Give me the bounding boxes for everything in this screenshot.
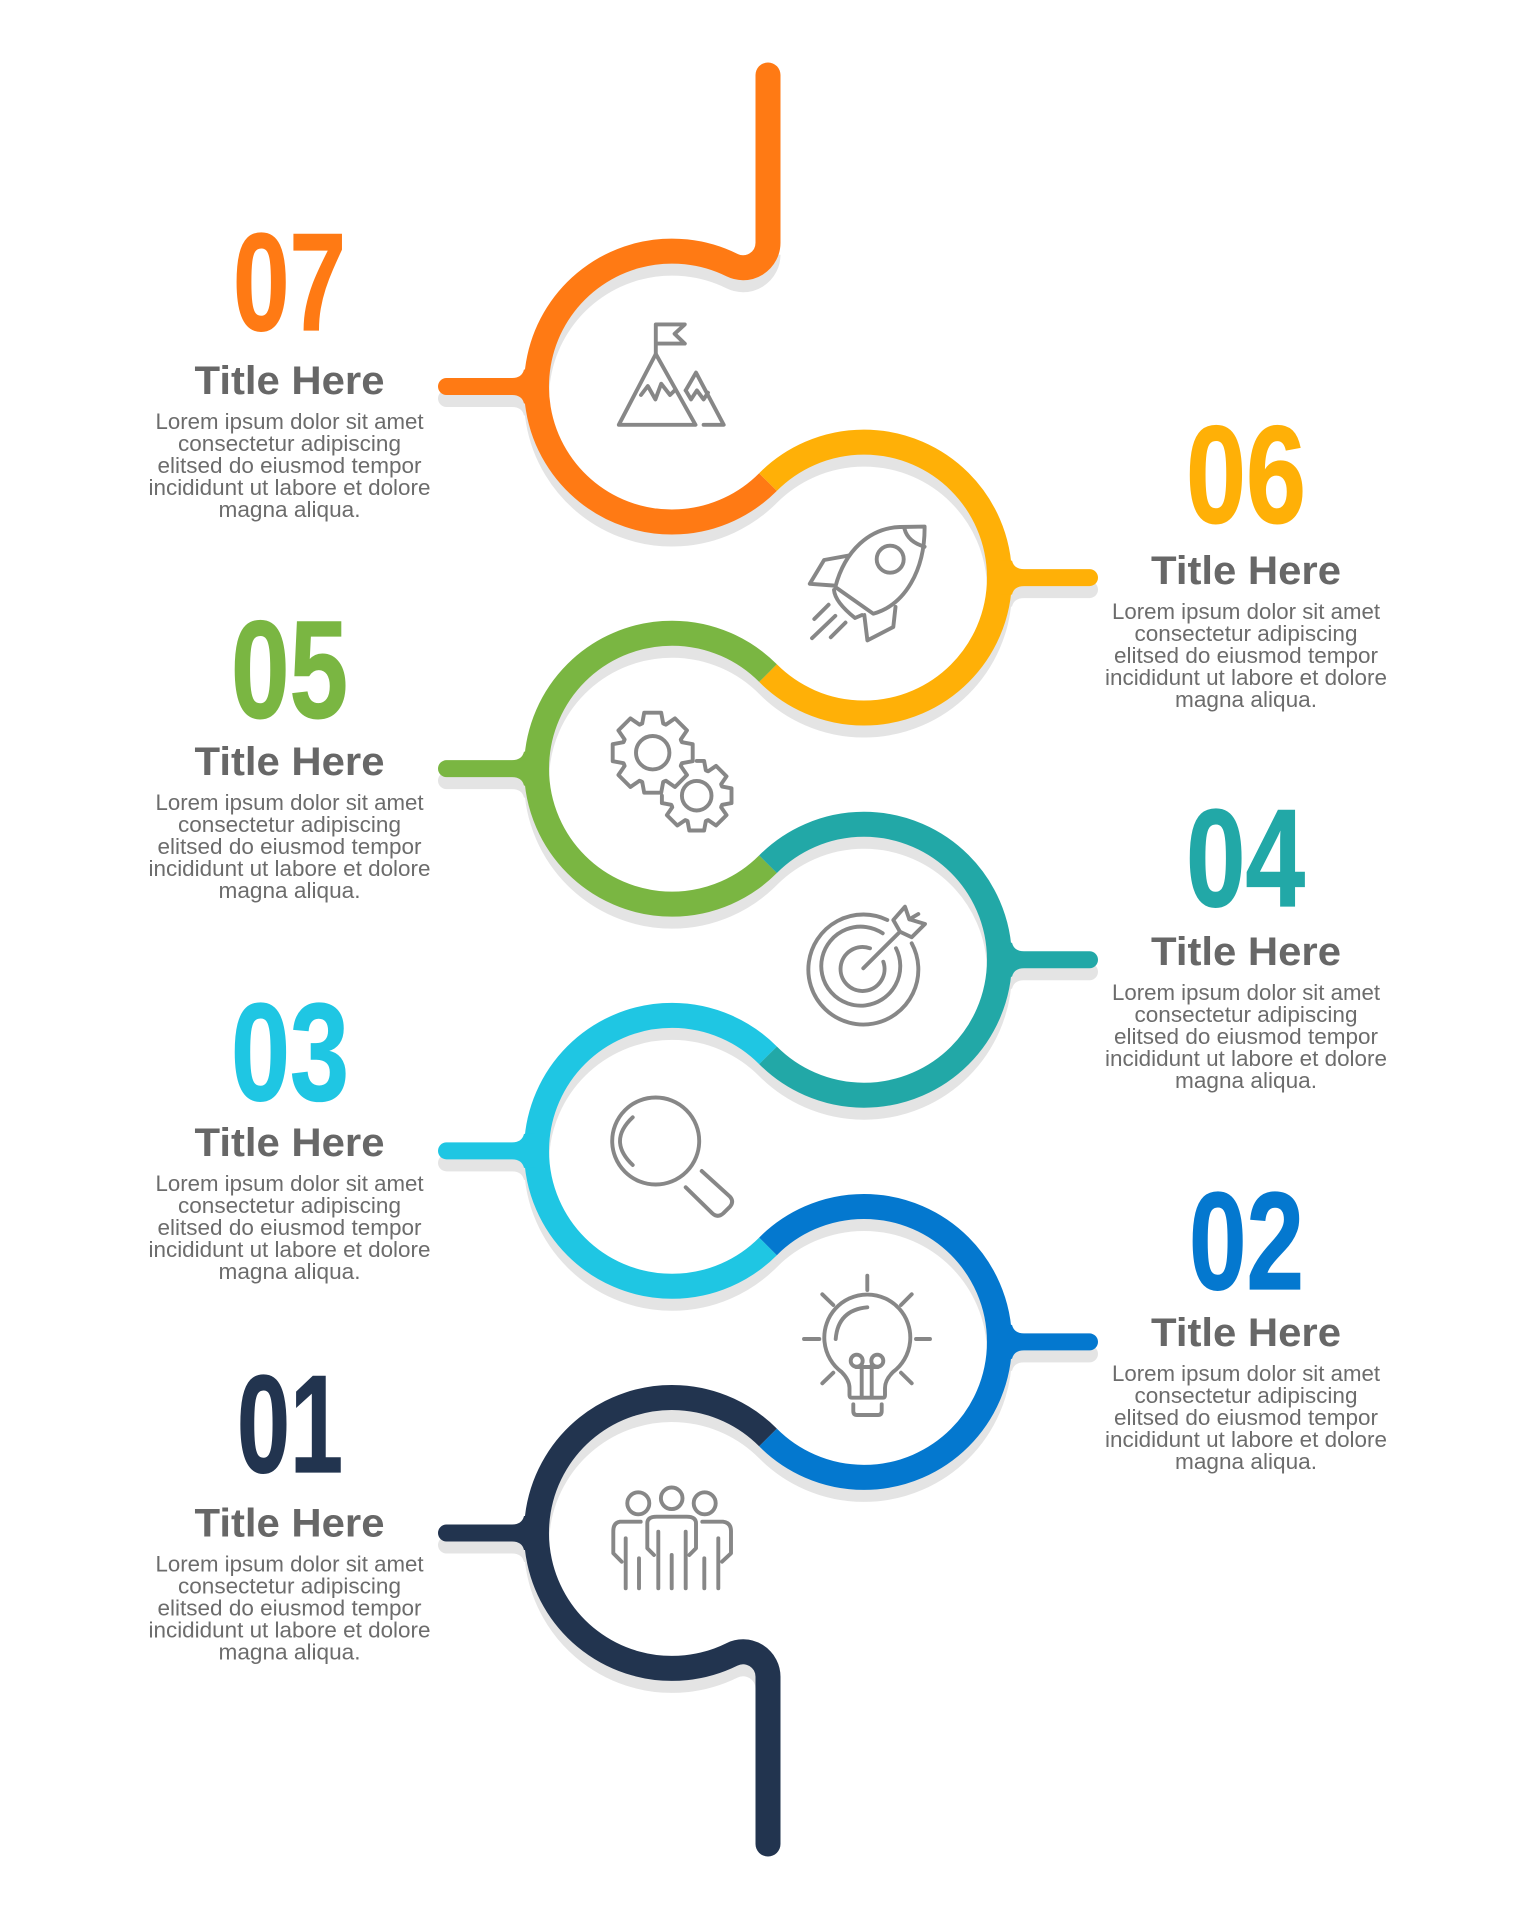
body 06: Lorem ipsum dolor sit amet xyxy=(1112,599,1380,624)
body 01 xyxy=(148,1552,430,1664)
body 05: magna aliqua. xyxy=(218,878,360,903)
body 06 xyxy=(1105,599,1387,712)
body 06: elitsed do eiusmod tempor xyxy=(1114,643,1378,668)
path segment 07: orange loop with top stem and left connector xyxy=(438,62,780,522)
text block: step 04 xyxy=(1105,781,1387,1093)
title 04: Title Here xyxy=(1151,930,1341,974)
body 03: Lorem ipsum dolor sit amet xyxy=(156,1171,424,1196)
body 07: consectetur adipiscing xyxy=(178,431,401,456)
path segment 03: cyan loop with left connector xyxy=(438,1015,768,1286)
body 04: incididunt ut labore et dolore xyxy=(1105,1046,1387,1071)
icon: target with arrow xyxy=(808,907,925,1025)
body 01: incididunt ut labore et dolore xyxy=(148,1618,430,1642)
body 05: elitsed do eiusmod tempor xyxy=(158,834,422,859)
body 04 xyxy=(1105,980,1387,1093)
icon: group of people xyxy=(613,1488,731,1588)
icon: magnifying glass xyxy=(612,1098,732,1216)
body 01: consectetur adipiscing xyxy=(178,1574,401,1598)
title 05: Title Here xyxy=(194,740,384,784)
body 02: incididunt ut labore et dolore xyxy=(1105,1427,1387,1452)
body 04: Lorem ipsum dolor sit amet xyxy=(1112,980,1380,1005)
body 07 xyxy=(148,409,430,522)
icon: rocket xyxy=(810,527,925,640)
body 02 xyxy=(1105,1361,1387,1474)
body 02: magna aliqua. xyxy=(1175,1449,1317,1474)
body 04: consectetur adipiscing xyxy=(1134,1002,1358,1027)
body 01: magna aliqua. xyxy=(218,1640,360,1664)
icon: mountain with flag xyxy=(619,324,724,425)
body 03: elitsed do eiusmod tempor xyxy=(158,1215,422,1240)
body 05: consectetur adipiscing xyxy=(178,812,401,837)
path segment 05: green loop with left connector xyxy=(438,633,768,904)
body 03: incididunt ut labore et dolore xyxy=(148,1237,430,1262)
title 01: Title Here xyxy=(194,1502,384,1546)
body 03 xyxy=(148,1171,430,1284)
path segment 02: blue loop with right connector xyxy=(768,1206,1098,1477)
number 01: 01 xyxy=(237,1347,343,1502)
body 02: Lorem ipsum dolor sit amet xyxy=(1112,1361,1380,1386)
icon: light bulb xyxy=(804,1276,930,1415)
body 01: elitsed do eiusmod tempor xyxy=(158,1596,422,1620)
title 07: Title Here xyxy=(194,359,384,403)
text block: step 07 xyxy=(148,205,430,522)
icon: gears xyxy=(613,713,732,830)
number 07: 07 xyxy=(233,205,346,360)
body 04: elitsed do eiusmod tempor xyxy=(1114,1024,1378,1049)
drop shadows under the winding path xyxy=(438,255,1098,1689)
title 06: Title Here xyxy=(1151,549,1341,593)
number 02: 02 xyxy=(1189,1164,1304,1319)
body 05: incididunt ut labore et dolore xyxy=(148,856,430,881)
body 07: magna aliqua. xyxy=(218,497,360,522)
body 07: incididunt ut labore et dolore xyxy=(148,475,430,500)
body 03: consectetur adipiscing xyxy=(178,1193,401,1218)
body 05 xyxy=(148,790,430,903)
title 02: Title Here xyxy=(1151,1311,1341,1355)
body 02: elitsed do eiusmod tempor xyxy=(1114,1405,1378,1430)
text block: step 05 xyxy=(148,592,430,903)
body 02: consectetur adipiscing xyxy=(1134,1383,1358,1408)
path segment 01: navy loop with bottom stem and left connector xyxy=(438,1397,780,1856)
body 07: Lorem ipsum dolor sit amet xyxy=(156,409,424,434)
path segment 04: teal loop with right connector xyxy=(768,824,1098,1095)
path segment 06: yellow loop with right connector xyxy=(768,442,1098,713)
text block: step 01 xyxy=(148,1347,430,1664)
text block: step 03 xyxy=(148,975,430,1284)
body 05: Lorem ipsum dolor sit amet xyxy=(156,790,424,815)
body 06: magna aliqua. xyxy=(1175,687,1317,712)
body 01: Lorem ipsum dolor sit amet xyxy=(156,1552,424,1576)
number 04: 04 xyxy=(1186,781,1305,936)
number 03: 03 xyxy=(231,975,349,1130)
title 03: Title Here xyxy=(194,1121,384,1165)
body 06: consectetur adipiscing xyxy=(1134,621,1358,646)
body 04: magna aliqua. xyxy=(1175,1068,1317,1093)
number 06: 06 xyxy=(1186,398,1306,552)
body 03: magna aliqua. xyxy=(218,1259,360,1284)
number 05: 05 xyxy=(231,592,348,748)
body 06: incididunt ut labore et dolore xyxy=(1105,665,1387,690)
body 07: elitsed do eiusmod tempor xyxy=(158,453,422,478)
text block: step 06 xyxy=(1105,398,1387,712)
text block: step 02 xyxy=(1105,1164,1387,1474)
